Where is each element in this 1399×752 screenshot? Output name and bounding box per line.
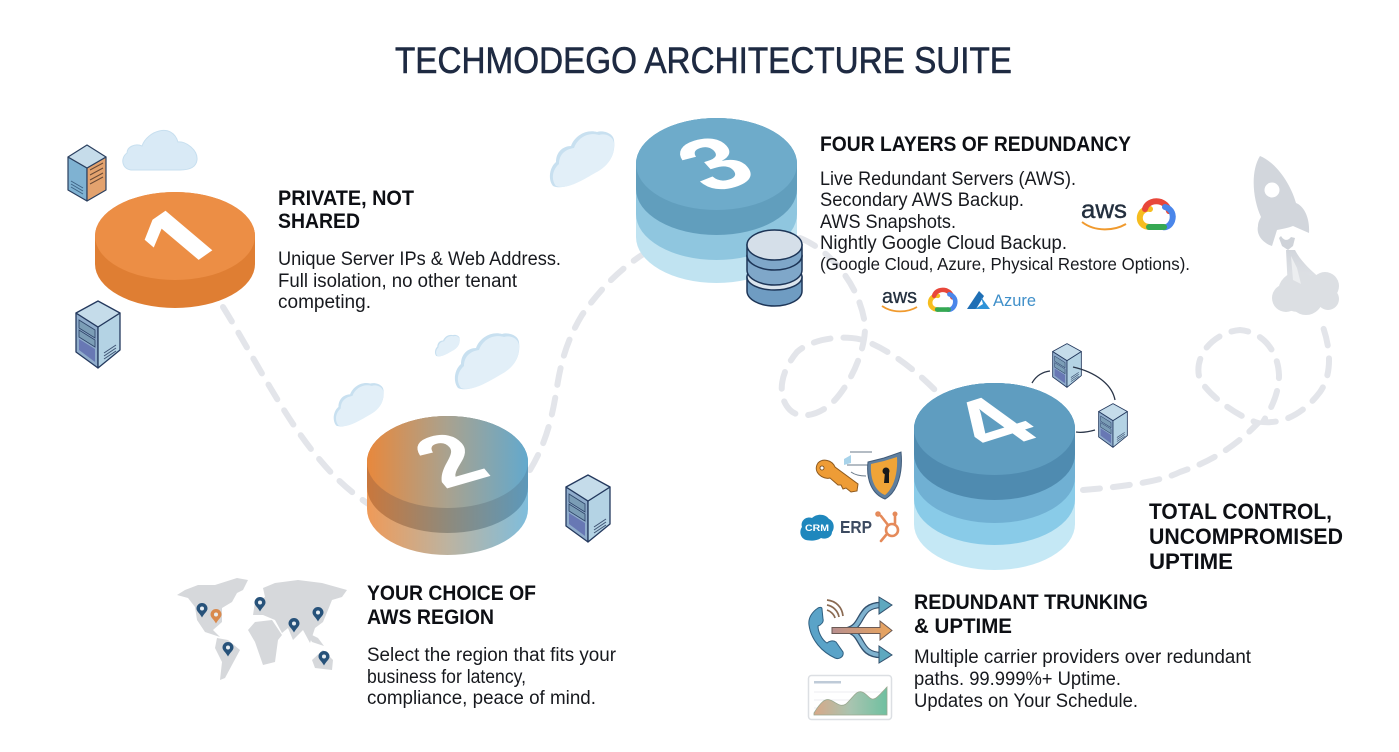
icon: aws logo large: aws (1081, 196, 1127, 224)
text: four layers of redundancy (820, 132, 1190, 274)
numeral 2: 2 (394, 416, 506, 503)
icon: phone with trunk arrows (809, 597, 892, 663)
icon: crm erp hubspot (800, 512, 898, 541)
panel: disk 1 (95, 192, 255, 308)
icon: aws logo small: aws (882, 286, 917, 308)
icon: server beside disk 2 (566, 475, 610, 542)
numeral 4: 4 (921, 383, 1063, 464)
text: aws region (367, 581, 617, 709)
icon: cloud beside disk 3 (550, 131, 614, 187)
dashed route: disk 1 to disk 2 (223, 307, 370, 505)
icon: left cloud (334, 383, 384, 426)
icon: azure logo (967, 291, 1036, 310)
text: redundant trunking: & UPTIME (914, 614, 1012, 638)
numeral 3: 3 (656, 119, 774, 208)
numeral 1: 1 (110, 182, 260, 301)
text: four layers of redundancy: Secondary AWS Backup. (820, 190, 1024, 211)
icon: azure logo: Azure (993, 291, 1036, 310)
text: four layers of redundancy: Nightly Google Cloud Backup. (820, 233, 1067, 254)
icon: server orange panel (68, 145, 106, 201)
icon: google cloud logo small (930, 290, 955, 310)
text: four layers of redundancy: AWS Snapshots. (820, 212, 956, 233)
text: aws region: Select the region that fits your (367, 645, 617, 666)
text: four layers of redundancy: Live Redundant Servers (AWS). (820, 169, 1076, 190)
text: private not shared: Full isolation, no other tenant (278, 271, 518, 292)
icon: rocket (1254, 156, 1339, 315)
text: private not shared (278, 186, 561, 313)
text: aws region: YOUR CHOICE OF (367, 581, 536, 605)
icon: large cloud (455, 333, 519, 389)
text: four layers of redundancy: FOUR LAYERS OF REDUNDANCY (820, 132, 1131, 156)
title: TECHMODEGO ARCHITECTURE SUITE (395, 40, 1012, 81)
text: private not shared: PRIVATE, NOT (278, 186, 414, 210)
text: total control (1149, 499, 1343, 574)
icon: uptime chart card (808, 676, 892, 720)
text: total control: TOTAL CONTROL, (1149, 499, 1332, 524)
dashed route: disk 2 to disk 3 (530, 253, 645, 470)
arrows: server loop (1032, 367, 1115, 432)
text: private not shared: competing. (278, 292, 371, 313)
icon: crm erp hubspot: ERP (840, 517, 872, 537)
icon: server below disk 1 (76, 301, 120, 368)
panel: disk 4 (914, 383, 1075, 570)
icon: world map with pins (177, 578, 347, 680)
text: private not shared: SHARED (278, 209, 360, 233)
text: redundant trunking: REDUNDANT TRUNKING (914, 590, 1148, 614)
text: aws region: business for latency, (367, 667, 526, 688)
icon: small cloud (435, 335, 460, 356)
text: redundant trunking: paths. 99.999%+ Uptime. (914, 669, 1121, 690)
text: private not shared: Unique Server IPs & Web Address. (278, 249, 561, 270)
icon: crm erp hubspot: CRM (805, 523, 829, 534)
icon: server top right of disk 4 (1053, 344, 1081, 387)
text: redundant trunking (914, 590, 1252, 712)
dashed route: disk 3 loop to disk 4 (782, 238, 935, 415)
text: redundant trunking: Multiple carrier providers over redundant (914, 647, 1252, 668)
icon: database (747, 230, 802, 306)
text: redundant trunking: Updates on Your Schedule. (914, 691, 1138, 712)
icon: key and shield (816, 452, 901, 499)
icon: google cloud logo large (1140, 201, 1173, 227)
dashed route: disk 4 loop to rocket (1083, 327, 1329, 490)
icon: cloud top left (123, 130, 197, 170)
text: aws region: AWS REGION (367, 605, 494, 629)
text: total control: UPTIME (1149, 549, 1233, 574)
panel: disk 3 (636, 118, 797, 283)
text: aws region: compliance, peace of mind. (367, 688, 596, 709)
text: four layers of redundancy: (Google Cloud, Azure, Physical Restore Options). (820, 254, 1190, 274)
panel: disk 2 (367, 416, 528, 555)
icon: server right of disk 4 (1099, 404, 1127, 447)
text: total control: UNCOMPROMISED (1149, 524, 1343, 549)
